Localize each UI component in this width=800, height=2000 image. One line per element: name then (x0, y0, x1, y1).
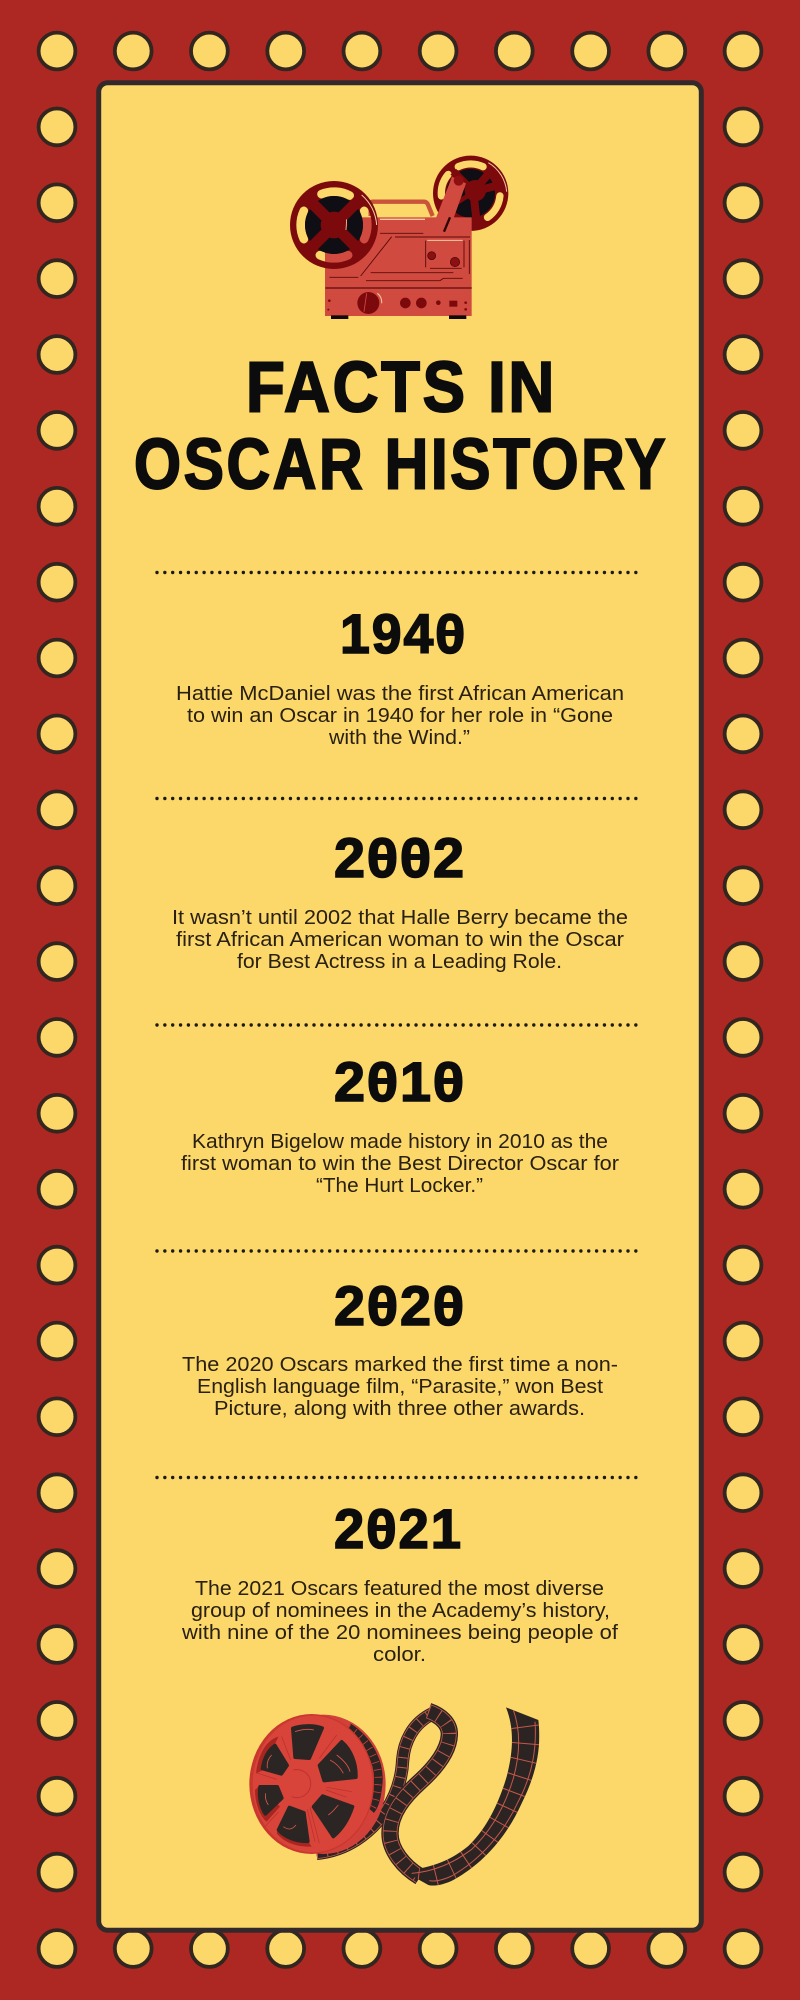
text: 2020 fact (182, 1354, 618, 1420)
title: OSCAR HISTORY (134, 426, 668, 504)
text: 2020 fact: Picture, along with three other awards. (214, 1398, 585, 1420)
year 2002: 2002 (334, 826, 466, 889)
text: 2021 fact: with nine of the 20 nominees being people of (181, 1622, 618, 1644)
text: 2021 fact: group of nominees in the Academy’s history, (191, 1600, 610, 1622)
text: 1940 fact: to win an Oscar in 1940 for her role in “Gone (187, 705, 613, 727)
section: 1940 (176, 602, 624, 749)
text: 2010 fact: “The Hurt Locker.” (316, 1175, 483, 1197)
year 2010: 2010 (334, 1050, 466, 1113)
title (134, 348, 668, 504)
year 1940: 1940 (340, 602, 467, 665)
text: 2002 fact: first African American woman to win the Oscar (176, 929, 624, 951)
text: 2021 fact (181, 1578, 618, 1666)
icon: film projector (290, 156, 508, 319)
section: 2010 (181, 1050, 619, 1197)
text: 1940 fact: with the Wind.” (328, 727, 470, 749)
text: 2002 fact (172, 907, 628, 973)
panel: main yellow card (99, 83, 701, 1930)
text: 2002 fact: It wasn’t until 2002 that Halle Berry became the (172, 907, 628, 929)
text: 1940 fact (176, 683, 624, 749)
icon: film reel and strip (249, 1703, 543, 1890)
title: FACTS IN (246, 348, 557, 428)
text: 2010 fact (181, 1131, 619, 1197)
text: 2021 fact: The 2021 Oscars featured the most diverse (195, 1578, 604, 1600)
section: 2002 (172, 826, 628, 973)
text: 2010 fact: Kathryn Bigelow made history in 2010 as the (192, 1131, 608, 1153)
text: 1940 fact: Hattie McDaniel was the first African American (176, 683, 624, 705)
year 2020: 2020 (334, 1274, 466, 1337)
section: 2020 (182, 1274, 618, 1420)
text: 2002 fact: for Best Actress in a Leading Role. (237, 951, 562, 973)
text: 2020 fact: The 2020 Oscars marked the first time a non- (182, 1354, 618, 1376)
text: 2010 fact: first woman to win the Best Director Oscar for (181, 1153, 619, 1175)
text: 2020 fact: English language film, “Parasite,” won Best (197, 1376, 603, 1398)
section: 2021 (181, 1497, 618, 1666)
text: 2021 fact: color. (373, 1644, 426, 1666)
year 2021: 2021 (334, 1497, 463, 1560)
